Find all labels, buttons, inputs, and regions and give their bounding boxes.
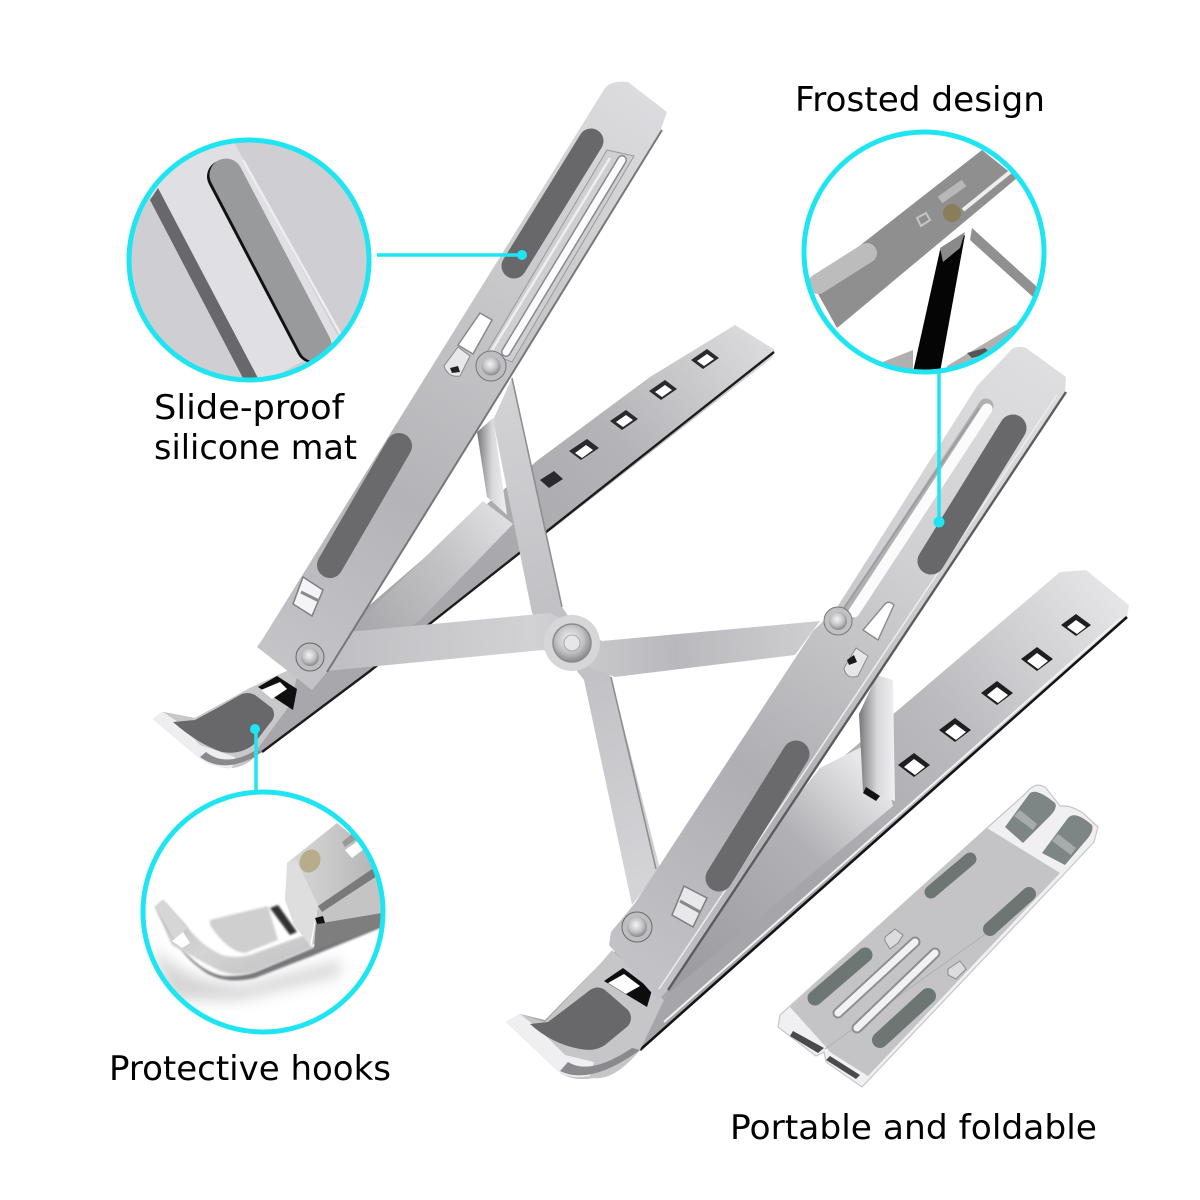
front lower window [672,886,707,927]
zoomed silicone pad detail [132,142,366,378]
folded slots [838,929,966,1028]
slider rail [487,150,634,362]
lower silicone pad [330,446,399,565]
hook silicone pad [173,693,274,753]
back base plate with vent holes [153,325,775,768]
callout circle: protective hooks [142,791,395,1033]
back arm upper screw [476,351,506,381]
front upper window [863,602,894,640]
zoomed hook detail [152,823,380,1006]
front arm [609,347,1066,1000]
callout leader: protective hooks [250,724,260,791]
folded silicone pads [815,859,1029,1040]
callout leader: frosted design [934,372,944,528]
folded stand thumbnail [778,785,1098,1087]
label: frosted design: Frosted design [795,80,1045,120]
front laptop stand [506,347,1129,1079]
front arm lower screw [622,912,652,942]
upper window [458,313,492,354]
horizontal strut [327,613,820,677]
lower window [293,577,323,616]
clear outline [778,785,1098,1087]
centre pivot boss [544,615,600,671]
crossing strut [493,378,660,905]
back stand arm [257,82,667,690]
callout circle: slide-proof silicone mat [128,120,370,385]
circle ring [804,132,1044,372]
label: portable and foldable: Portable and foldable [730,1108,1097,1148]
back hook [153,665,300,768]
folded hooks [790,792,1092,1079]
front hook [506,950,664,1079]
label: protective hooks: Protective hooks [109,1049,391,1089]
infographic page [112,82,1129,1140]
label: second line: silicone mat [154,428,357,468]
back arm lower screw [296,643,324,671]
back gusset plate [345,501,513,672]
callout circle: frosted design [803,132,1045,380]
long slot [850,406,986,612]
back laptop stand [153,325,775,768]
upper silicone pad [514,141,591,266]
front arm upper screw [824,607,852,635]
circle ring [143,792,383,1032]
front hook silicone pad [530,988,631,1050]
front base plate with vent holes [506,570,1129,1079]
front gusset plate [648,740,893,992]
zoomed frosted arm detail [810,150,1036,370]
back support post [477,418,507,515]
front upper silicone pad [931,428,1013,561]
hook slot [258,676,297,710]
label: slide-proof silicone mat: Slide-proof [154,388,345,428]
scissor bars and centre pivot [327,378,820,905]
circle ring [129,140,369,380]
front lower silicone pad [719,754,796,878]
front hook slot [604,968,652,1007]
folded body [790,828,1060,1076]
callout leader: silicone mat [377,250,527,260]
front support post [859,675,895,801]
